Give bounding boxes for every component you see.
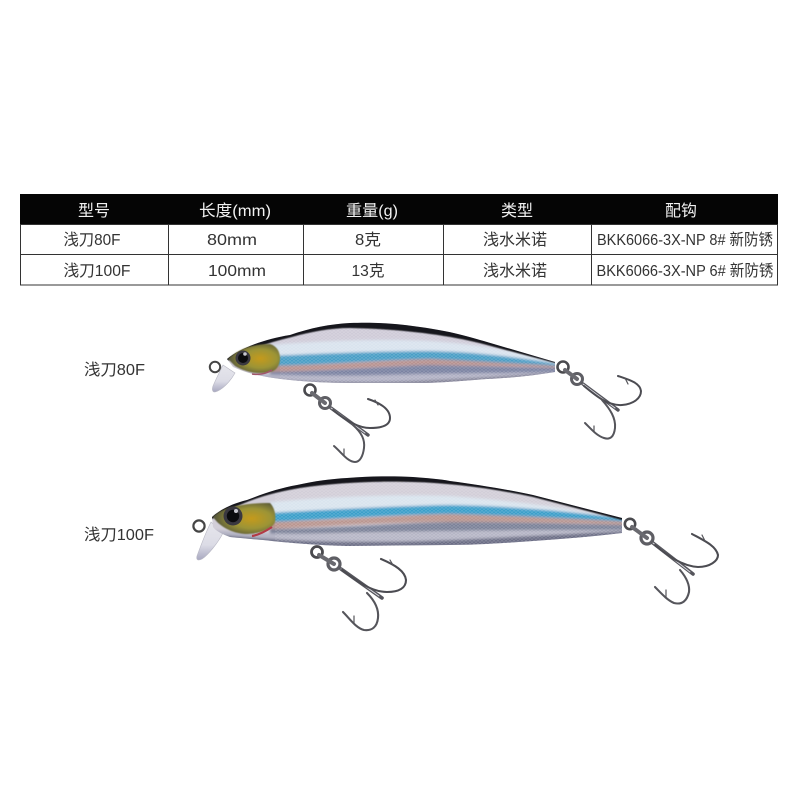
belly treble hook: [312, 546, 406, 630]
table row: 浅刀100F: BKK6066-3X-NP 6# 新防锈: [596, 262, 774, 280]
table row: 浅刀100F: 浅刀100F: [64, 262, 131, 280]
front line eye and lip: [210, 362, 235, 392]
label: 浅刀80F: 浅刀80F: [84, 361, 145, 379]
lure head and eye: [228, 344, 280, 374]
label: 浅刀100F: 浅刀100F: [84, 526, 154, 544]
front line eye and lip: [193, 520, 223, 560]
table row: 浅刀100F: 13克: [352, 262, 384, 280]
table row: 浅刀80F: BKK6066-3X-NP 8# 新防锈: [597, 231, 773, 249]
table row: 浅刀80F: 80mm: [207, 232, 257, 249]
tail treble hook: [558, 362, 641, 439]
lure: 浅刀80F: [210, 318, 641, 462]
table row: 浅刀80F: 浅水米诺: [483, 231, 547, 249]
tail treble hook: [625, 519, 718, 604]
table header row: 型号: [78, 202, 110, 220]
belly treble hook: [304, 384, 390, 462]
spec table: [20, 194, 778, 285]
table grid lines: [20, 224, 778, 285]
lure head and eye: [213, 503, 275, 536]
table header row: 重量(g): [346, 202, 398, 220]
table row: 浅刀80F: 浅刀80F: [64, 231, 121, 249]
table row: 浅刀80F: 8克: [355, 231, 381, 249]
table header row: 长度(mm): [199, 202, 271, 220]
table row: 浅刀100F: 100mm: [208, 263, 266, 280]
table header row: 类型: [501, 202, 533, 220]
table header row: 配钩: [665, 202, 697, 220]
lure body: [212, 476, 622, 546]
table row: 浅刀100F: 浅水米诺: [483, 262, 547, 280]
table header row: [20, 194, 778, 224]
lure: 浅刀100F: [193, 470, 718, 630]
table row: 浅刀100F: [64, 262, 774, 280]
lure body: [227, 322, 555, 383]
table row: 浅刀80F: [64, 231, 773, 249]
